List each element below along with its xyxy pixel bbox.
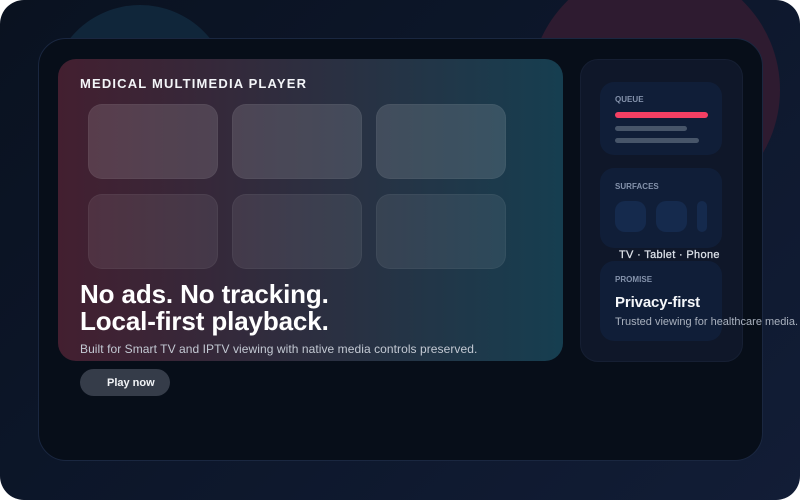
device frame	[38, 38, 763, 461]
subtitle: Built for Smart TV and IPTV viewing with native media controls preserved.	[80, 342, 477, 356]
surfaces label: SURFACES	[615, 182, 659, 191]
queue card	[600, 82, 722, 155]
hero panel	[58, 59, 563, 361]
promise heading: Privacy-first	[615, 294, 700, 311]
surface phone	[697, 201, 707, 232]
play button	[80, 369, 170, 396]
tile 5	[232, 194, 362, 269]
queue label: QUEUE	[615, 95, 644, 104]
tile 6	[376, 194, 506, 269]
teal circle	[50, 5, 230, 185]
queue bar 3	[615, 138, 699, 143]
headline: Local-first playback.	[80, 306, 329, 336]
tile grid	[88, 104, 506, 269]
headline	[80, 279, 329, 336]
queue bar active	[615, 112, 708, 118]
tile 4	[88, 194, 218, 269]
tile 3	[376, 104, 506, 179]
tile 1	[88, 104, 218, 179]
surface tablet	[656, 201, 687, 232]
button label: Play now	[107, 377, 155, 389]
tile 2	[232, 104, 362, 179]
promise text: Trusted viewing for healthcare media.	[615, 316, 798, 328]
promise label: PROMISE	[615, 275, 652, 284]
promise card	[600, 261, 722, 341]
pink circle	[530, 0, 780, 215]
surfaces card	[600, 168, 722, 248]
hero title: MEDICAL MULTIMEDIA PLAYER	[80, 76, 307, 91]
headline: No ads. No tracking.	[80, 279, 329, 309]
queue bar 2	[615, 126, 687, 131]
surfaces caption: TV · Tablet · Phone	[619, 249, 720, 261]
side panel	[580, 59, 743, 362]
surface tv	[615, 201, 646, 232]
